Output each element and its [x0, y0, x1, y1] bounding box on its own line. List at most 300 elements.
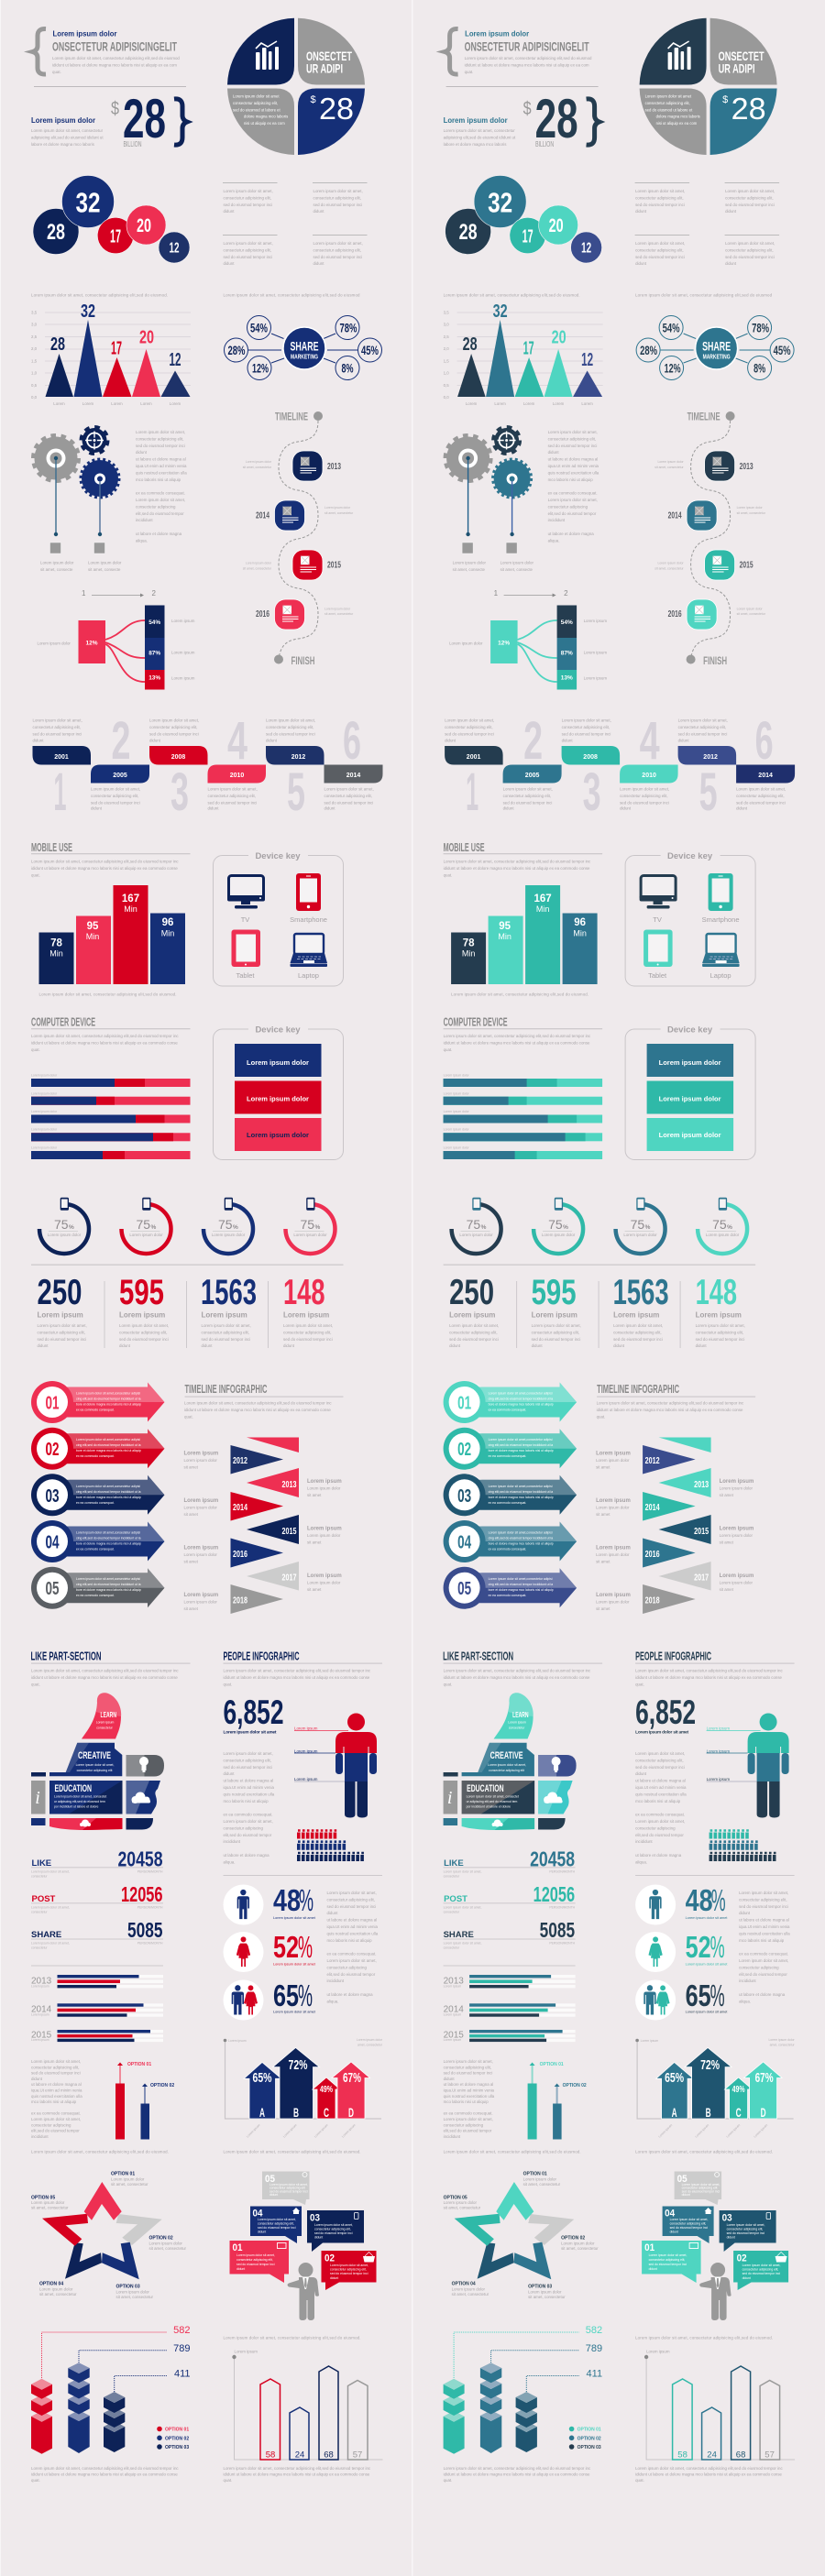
bubble 05: sed do eiusmod tempor inci — [270, 2189, 308, 2193]
timeline infographic flags: sit amet — [183, 1512, 199, 1517]
outlined bar chart: 68 — [736, 2450, 745, 2460]
key numbers: Lorem ipsum dolor sit amet, — [613, 1323, 663, 1328]
yearly bars: Lorem ipsum — [31, 2038, 50, 2042]
year steps timeline: didunt — [324, 806, 336, 810]
year steps timeline: consectetur adipisicing elit, — [91, 794, 138, 798]
percentage rows: mco laboris nisi ut aliquip — [326, 1938, 372, 1943]
sankey diagram: 54% — [148, 619, 160, 626]
year steps timeline: Lorem ipsum dolor sit amet, — [503, 786, 553, 792]
column two — [68, 2362, 90, 2453]
computer device stacked bars: Lorem ipsum dolor — [444, 1110, 470, 1113]
key numbers: Lorem ipsum — [613, 1310, 659, 1320]
key numbers: sed do eiusmod tempor inci — [283, 1337, 333, 1342]
year steps timeline: 2012 — [292, 754, 305, 761]
icon: light bulb — [552, 1757, 561, 1772]
ring gauges: Lorem ipsum dolor — [129, 1233, 163, 1237]
timeline infographic flags: sit amet — [183, 1560, 199, 1563]
percentage rows: % — [711, 1883, 726, 1917]
timeline infographic flags: 2013 — [282, 1480, 297, 1490]
people figure stat: aliqua. — [635, 1859, 647, 1864]
large person figure — [336, 1714, 377, 1818]
percentage rows: sed do eiusmod tempor inci — [326, 1904, 376, 1909]
computer device stacked bars: Lorem ipsum dolor — [31, 1110, 58, 1113]
key numbers: 250 — [37, 1273, 82, 1312]
bubble 03: consectetur adipiscing elit, — [727, 2227, 763, 2231]
triangle chart: 17 — [111, 339, 122, 359]
device key: colour legend — [213, 1025, 343, 1160]
timeline infographic flags: sit amet — [596, 1464, 610, 1470]
computer device stacked bars: COMPUTER DEVICE — [31, 1015, 95, 1028]
arrow column chart: 72% — [288, 2057, 308, 2073]
arrow 01: ex ea commodo consequat. — [489, 1408, 526, 1411]
bubble 04: didunt — [670, 2231, 678, 2234]
triangle chart: Lorem — [53, 401, 65, 406]
arrow 02: Lorem ipsum dolor sit amet,consectetur adipisi — [489, 1438, 553, 1441]
mobile use bar chart: 96 — [574, 917, 586, 928]
timeline path: 2016 — [256, 608, 270, 619]
isometric stacked columns: 582 — [586, 2325, 602, 2336]
mobile use bar chart: Lorem ipsum dolor sit amet, consectetur adipisicing elit,sed do eiusmod tempor inc — [444, 860, 591, 863]
text columns: Lorem ipsum dolor sit amet, — [725, 189, 775, 193]
presenter figure — [288, 2263, 319, 2320]
timeline infographic flags: Lorem ipsum — [183, 1593, 218, 1598]
people figure stat: didunt — [224, 1771, 235, 1776]
gears text block: Lorem ipsum dolor sit amet, — [136, 498, 185, 502]
triangle chart: 0,0 — [444, 395, 449, 400]
arrow column chart — [635, 2038, 795, 2154]
percentage rows: 65 — [686, 1979, 711, 2012]
triangle chart: Lorem — [82, 401, 94, 406]
gears text block: ex ea commodo consequat. — [136, 491, 185, 496]
triangle chart: 32 — [81, 301, 95, 322]
triangle chart: 28 — [50, 334, 65, 355]
share marketing diagram: Lorem ipsum dolor sit amet, consectetur adipisicing elit,sed do eiusmod — [224, 293, 360, 297]
key numbers: didunt — [613, 1343, 625, 1348]
triangle chart: Lorem — [494, 401, 506, 406]
stat: 28 billion: Lorem ipsum dolor sit amet, consectetur — [444, 128, 515, 133]
people figure stat: aliqua. — [224, 1859, 235, 1864]
timeline path: 2015 — [740, 559, 754, 570]
star diagram: sit amet, consectetur — [444, 2205, 481, 2209]
bubble 02: didunt — [330, 2276, 338, 2280]
triangle chart: Lorem ipsum dolor sit amet, consectetur adipisicing elit,sed do eiusmod. — [31, 293, 168, 297]
share marketing diagram: 28% — [227, 343, 246, 357]
icon: woman — [648, 1936, 663, 1967]
key numbers: consectetur adipisicing elit, — [37, 1330, 85, 1334]
key numbers: didunt — [37, 1343, 49, 1348]
bubble 05: 05 — [265, 2174, 275, 2185]
outlined bar chart: 58 — [677, 2450, 688, 2460]
social stats: 5085 — [127, 1918, 163, 1942]
bubble 01: consectetur adipiscing elit, — [236, 2258, 273, 2262]
timeline path: 2013 — [740, 461, 754, 472]
thumbs-up graphic: por incididunt ut labore et dolore — [54, 1805, 99, 1809]
timeline path: Lorem ipsum dolor — [737, 607, 764, 610]
mobile use bar chart: quat. — [444, 872, 452, 878]
percentage rows: 52 — [273, 1930, 299, 1964]
outlined bar chart: 24 — [295, 2450, 304, 2460]
bubble 02: Lorem ipsum dolor sit amet, — [330, 2264, 368, 2267]
year steps timeline: didunt — [678, 739, 689, 743]
triangle chart: Lorem — [523, 401, 535, 406]
isometric stacked columns: 582 — [173, 2325, 191, 2336]
triangle chart: 3,5 — [31, 310, 38, 315]
bubble 03: 03 — [722, 2212, 732, 2223]
people figure stat: Lorem ipsum dolor sit amet, — [635, 1819, 685, 1824]
text columns — [635, 182, 779, 266]
year steps timeline: 2010 — [230, 773, 244, 779]
computer device stacked bars: COMPUTER DEVICE — [444, 1015, 508, 1028]
pie chart: ONSECTET — [306, 49, 352, 63]
key numbers: Lorem ipsum dolor sit amet, — [119, 1323, 169, 1328]
arrow 01: ex ea commodo consequat. — [76, 1408, 115, 1411]
social stats: SHARE — [444, 1930, 474, 1940]
sankey diagram: 2 — [152, 589, 156, 597]
icon: speech blob — [80, 1820, 91, 1827]
computer device stacked bars: Lorem ipsum dolor — [444, 1145, 470, 1149]
triangle chart — [444, 293, 603, 406]
timeline infographic flags: sit amet — [596, 1560, 610, 1563]
icon: man — [237, 1890, 249, 1919]
text columns: consectetur adipisicing elit, — [314, 195, 361, 200]
mobile use bar chart: ididunt ut labore et dolore magna mco laboris nisi ut aliquip ex ea commodo conse — [31, 866, 178, 871]
arrow 05: Lorem ipsum dolor sit amet,consectetur adipisi — [489, 1577, 553, 1581]
legend: OPTION 03 — [578, 2445, 601, 2450]
mobile use bar chart: MOBILE USE — [31, 841, 72, 854]
percentage rows: quis nostrud exercitation ulla — [739, 1931, 790, 1935]
year steps timeline: Lorem ipsum dolor sit amet, — [266, 718, 315, 722]
mobile use bar chart: Min — [161, 929, 174, 938]
percentage rows: Lorem ipsum dolor sit amet — [273, 1916, 316, 1920]
timeline infographic flags: Lorem ipsum — [596, 1545, 631, 1551]
gears text block: ut labore et dolore magna — [136, 532, 182, 536]
mobile use bar chart: 95 — [87, 921, 99, 932]
legend: OPTION 01 — [165, 2427, 189, 2432]
social stats: PERSON/MONTH — [549, 1941, 576, 1945]
text columns: Lorem ipsum dolor sit amet, — [314, 189, 363, 193]
isometric stacked columns: Lorem ipsum dolor sit amet, consectetur adipisicing elit,sed do eiusmod tempor inc — [444, 2466, 591, 2471]
percentage rows: consectetur adipisicing elit, — [739, 1897, 787, 1902]
percentage rows: ex ea commodo consequat. — [739, 1952, 788, 1957]
timeline path: 2015 — [327, 559, 341, 570]
timeline path: 2016 — [668, 608, 682, 619]
outlined bar chart: 58 — [266, 2450, 275, 2460]
device key: icons: Smartphone — [702, 915, 740, 924]
bubble chart: 32 — [488, 187, 512, 218]
ring gauges: Lorem ipsum dolor — [212, 1233, 246, 1237]
text columns: consectetur adipisicing elit, — [635, 195, 684, 200]
gears text block: consectetur adipisicing elit, — [548, 436, 596, 441]
year steps timeline: didunt — [445, 739, 456, 743]
panel: teal colourway — [443, 18, 795, 2483]
text columns: Lorem ipsum dolor sit amet, — [224, 189, 273, 193]
arrow 04: cing elit,sed do eiusmod tempor incididunt ut la — [76, 1536, 141, 1540]
gears text block: elit,sed do eiusmod tempor — [548, 511, 597, 516]
speech bubbles with presenter — [229, 2172, 376, 2320]
text with option bars: iqua.Ut enim ad minim venia — [31, 2088, 82, 2093]
year steps timeline: 4 — [227, 711, 248, 771]
timeline infographic flags: 2018 — [645, 1596, 660, 1606]
heading: people infographic: Lorem ipsum dolor sit amet, consectetur adipisicing elit,sed do eiusmod tempor inc — [635, 1668, 783, 1673]
computer device stacked bars — [31, 1015, 191, 1159]
percentage rows: Lorem ipsum dolor sit amet, — [326, 1891, 377, 1895]
text with option bars: quis nostrud exercitation ulla — [444, 2094, 495, 2099]
text with option bars: OPTION 02 — [150, 2083, 174, 2088]
computer device stacked bars — [444, 1015, 602, 1159]
timeline infographic flags: sit amet — [307, 1540, 322, 1545]
legend — [569, 2427, 601, 2450]
people figure stat: Lorem ipsum dolor sit amet, — [224, 1819, 273, 1824]
sankey diagram: 12% — [85, 640, 98, 647]
bubble 02: didunt — [742, 2276, 751, 2280]
heading: like part-section: LIKE PART-SECTION — [31, 1650, 101, 1663]
timeline infographic flags: sit amet — [596, 1512, 610, 1517]
year steps timeline: consectetur adipisicing elit, — [266, 725, 314, 729]
bubble chart: 12 — [581, 240, 591, 257]
year steps timeline: 3 — [583, 762, 601, 822]
heading: people infographic — [224, 1650, 382, 1686]
social stats: consectetur — [444, 1946, 460, 1950]
people figure stat: Lorem ipsum dolor sit amet, — [224, 1751, 273, 1756]
share marketing diagram: 8% — [754, 361, 765, 376]
text with option bars: elit,sed do eiusmod tempor — [31, 2129, 80, 2133]
bubble 02 — [321, 2251, 376, 2290]
mobile use bar chart — [444, 841, 602, 997]
stat: 28 billion: labore et dolore magna mco laboris — [444, 142, 507, 147]
numbered arrow list — [444, 1381, 577, 1609]
key numbers: didunt — [283, 1343, 295, 1348]
header block: Lorem ipsum dolor sit amet, consectetur adipisicing elit,sed do eiusmod — [465, 56, 592, 60]
arrow 03: cing elit,sed do eiusmod tempor incididunt ut la — [76, 1490, 141, 1494]
year steps timeline: didunt — [91, 806, 103, 810]
text columns: consectetur adipisicing elit, — [725, 247, 774, 252]
text columns: consectetur adipisicing elit, — [725, 195, 774, 200]
social stats: consectetur — [444, 1910, 460, 1913]
yearly bars: Lorem ipsum — [444, 2012, 461, 2016]
yearly bars: 2015 — [31, 2031, 52, 2040]
timeline path: Lorem ipsum dolor — [658, 561, 684, 565]
year steps timeline: sed do eiusmod tempor inci — [620, 800, 669, 805]
panel: red and navy colourway — [31, 18, 383, 2483]
bubble 03: 03 — [310, 2212, 320, 2223]
isometric stacked columns: ididunt ut labore et dolore magna mco laboris nisi ut aliquip ex ea commodo conse — [444, 2472, 590, 2476]
star diagram: sit amet, consectetur — [523, 2182, 561, 2187]
text columns: consectetur adipisicing elit, — [314, 247, 361, 252]
mobile use bar chart: Min — [462, 949, 475, 959]
text with option bars: ex ea commodo consequat. — [444, 2111, 493, 2116]
percentage rows: ex ea commodo consequat. — [326, 1952, 376, 1957]
gears text block: mco laboris nisi ut aliquip — [136, 477, 182, 482]
bubble chart: 32 — [75, 187, 101, 218]
arrow column chart: Lorem ipsum dolor sit amet, consectetur adipisicing elit,sed do eiusmod. — [224, 2150, 361, 2154]
percentage rows: % — [298, 1930, 313, 1964]
timeline infographic flags: Lorem ipsum dolor — [720, 1580, 753, 1585]
percentage rows: iqua.Ut enim ad minim venia — [739, 1924, 790, 1929]
percentage rows: incididunt — [326, 1979, 345, 1983]
thumbs-up graphic: i — [447, 1788, 452, 1808]
heading: people infographic — [635, 1650, 795, 1686]
arrow column chart: C — [736, 2105, 742, 2120]
key numbers — [31, 1265, 343, 1348]
ring gauges: % — [69, 1224, 74, 1231]
computer device stacked bars: Lorem ipsum dolor — [444, 1074, 470, 1078]
triangle chart: 0,5 — [444, 383, 449, 388]
timeline path: TIMELINE — [275, 411, 308, 423]
timeline infographic flags: TIMELINE INFOGRAPHIC — [597, 1383, 679, 1396]
timeline infographic flags: Lorem ipsum dolor — [596, 1458, 630, 1463]
gears diagram — [33, 427, 122, 572]
device key: icons: Tablet — [648, 971, 667, 980]
key numbers: 595 — [532, 1273, 577, 1312]
bubble 04: 04 — [253, 2209, 263, 2220]
arrow column chart: Lorem ipsum dolor — [769, 2038, 795, 2042]
timeline path: 2014 — [256, 510, 270, 521]
icon: 2013 document — [705, 451, 735, 481]
percentage rows: % — [710, 1930, 725, 1964]
people figure stat: incididunt — [635, 1839, 653, 1844]
device key: colour legend — [625, 1025, 755, 1160]
ring gauges: Lorem ipsum dolor — [459, 1233, 493, 1237]
stat: 28 billion: BILLION — [123, 140, 142, 148]
arrow column chart: C — [324, 2105, 329, 2120]
timeline infographic flags: Lorem ipsum dolor — [720, 1533, 753, 1538]
year steps timeline: Lorem ipsum dolor sit amet, — [324, 786, 374, 792]
thumbs-up graphic: consectetur adipiscing elit — [489, 1769, 524, 1772]
text with option bars: Lorem ipsum dolor sit amet, — [31, 2059, 81, 2064]
column three — [104, 2392, 125, 2452]
triangle chart: Lorem — [581, 401, 593, 406]
column two — [480, 2362, 501, 2453]
timeline path: sit amet, consectetur — [654, 466, 684, 469]
text with option bars: OPTION 02 — [563, 2083, 587, 2088]
triangle chart: 12 — [169, 350, 182, 370]
timeline infographic flags: Lorem ipsum dolor sit amet, consectetur adipisicing elit,sed do eiusmod tempor inc — [597, 1400, 744, 1406]
social stats: Lorem ipsum dolor sit amet, — [444, 1941, 481, 1945]
presenter figure — [699, 2263, 732, 2320]
arrow 03: bore et dolore magna mco laboris nisi ut aliquip — [489, 1496, 554, 1499]
gears diagram: Lorem ipsum dolor — [453, 561, 486, 565]
text with option bars: consectetur adipiscing — [444, 2122, 484, 2127]
key numbers: consectetur adipisicing elit, — [613, 1330, 662, 1334]
arrow 04: cing elit,sed do eiusmod tempor incididunt ut la — [489, 1536, 553, 1540]
bubble 04 — [663, 2207, 714, 2243]
social stats: PERSON/MONTH — [549, 1906, 576, 1910]
pie chart: 28 — [319, 92, 354, 126]
percentage rows: iqua.Ut enim ad minim venia — [326, 1924, 378, 1929]
heading: like part-section — [31, 1650, 191, 1686]
yearly bars — [444, 1965, 576, 2042]
arrow 01: bore et dolore magna mco laboris nisi ut aliquip — [76, 1402, 141, 1406]
year steps timeline: Lorem ipsum dolor sit amet, — [445, 718, 494, 722]
sankey diagram: 2 — [564, 589, 568, 597]
arrow 02: Lorem ipsum dolor sit amet,consectetur adipisi — [76, 1438, 140, 1441]
pie chart: ONSECTET — [719, 49, 764, 63]
arrow column chart: B — [293, 2105, 299, 2120]
year steps timeline: sed do eiusmod tempor inci — [562, 731, 610, 736]
star diagram: Lorem ipsum dolor — [561, 2242, 595, 2245]
mobile use bar chart: MOBILE USE — [444, 841, 485, 854]
computer device stacked bars: Lorem ipsum dolor — [31, 1145, 58, 1149]
thumbs-up graphic: i — [35, 1788, 40, 1808]
social stats: PERSON/MONTH — [138, 1906, 163, 1910]
text columns: Lorem ipsum dolor sit amet, — [635, 189, 685, 193]
year steps timeline: Lorem ipsum dolor sit amet, — [562, 718, 611, 722]
gears diagram — [446, 427, 534, 572]
outlined bar chart: Lorem ipsum — [646, 2350, 670, 2353]
stat: 28 billion: $ — [523, 99, 532, 119]
year steps timeline: didunt — [503, 806, 514, 810]
key numbers: sed do eiusmod tempor inci — [532, 1337, 580, 1342]
text columns: sed do eiusmod tempor inci — [224, 203, 272, 207]
bubble 05: didunt — [270, 2193, 278, 2197]
outlined bar chart: Lorem ipsum dolor sit amet, consectetur adipisicing elit,sed do eiusmod tempor inc — [224, 2466, 371, 2471]
gears text block: didunt — [136, 450, 148, 455]
percentage rows: aliqua. — [326, 1999, 338, 2003]
bubble 03: Lorem ipsum dolor sit amet, — [727, 2223, 764, 2227]
device key: icons: TV — [653, 915, 662, 924]
people figure stat: Lorem ipsum dolor sit amet — [224, 1730, 277, 1736]
percentage rows — [224, 1883, 379, 2020]
pictogram rows — [297, 1831, 364, 1858]
people figure stat: 6,852 — [635, 1694, 696, 1731]
legend: OPTION 03 — [165, 2445, 189, 2450]
gears text block: sed do eiusmod tempor inci — [136, 444, 185, 448]
key numbers: didunt — [696, 1343, 707, 1348]
key numbers: sed do eiusmod tempor inci — [202, 1337, 250, 1342]
year steps timeline: 2005 — [113, 773, 127, 779]
timeline path: FINISH — [292, 654, 315, 667]
percentage rows: consectetur adipisicing elit, — [326, 1897, 375, 1902]
ring gauges: 75 — [136, 1217, 150, 1232]
yearly bars: Lorem ipsum — [444, 1985, 461, 1989]
year steps timeline: sed do eiusmod tempor inci — [266, 731, 315, 736]
percentage rows: quis nostrud exercitation ulla — [326, 1931, 379, 1935]
share marketing diagram: MARKETING — [291, 354, 318, 361]
key numbers: 1563 — [201, 1273, 257, 1312]
star diagram: OPTION 01 — [523, 2172, 547, 2177]
people figure stat: didunt — [635, 1771, 647, 1776]
isometric stacked columns: ididunt ut labore et dolore magna mco laboris nisi ut aliquip ex ea commodo conse — [31, 2472, 178, 2476]
year steps timeline: sed do eiusmod tempor inci — [736, 800, 786, 805]
social stats: Lorem ipsum dolor sit amet, — [31, 1941, 70, 1945]
text with option bars: OPTION 01 — [540, 2062, 564, 2067]
timeline infographic flags: 2014 — [645, 1503, 660, 1513]
year steps timeline: 6 — [755, 711, 774, 771]
text with option bars: sed do eiusmod tempor inci — [444, 2071, 492, 2076]
triangle chart: 3,0 — [31, 323, 38, 326]
year steps timeline: didunt — [33, 739, 44, 743]
triangle chart: Lorem — [466, 401, 478, 406]
timeline path: sit amet, consectetur — [324, 612, 354, 616]
computer device stacked bars: Lorem ipsum dolor sit amet, consectetur adipisicing elit,sed do eiusmod tempor inc — [444, 1034, 591, 1038]
key numbers: 148 — [696, 1273, 737, 1312]
arrow 05: 05 — [46, 1579, 59, 1599]
timeline infographic flags: Lorem ipsum — [720, 1573, 754, 1579]
people figure stat: quis nostrud exercitation ulla — [224, 1792, 275, 1796]
star diagram: Lorem ipsum dolor — [528, 2289, 562, 2295]
key numbers: Lorem ipsum dolor sit amet, — [37, 1323, 87, 1328]
header block: ididunt ut labore et dolore magna mco laboris nisi ut aliquip ex ea com — [52, 62, 177, 67]
percentage rows: % — [299, 1883, 314, 1917]
year steps timeline: Lorem ipsum dolor sit amet, — [736, 786, 786, 792]
mobile use bar chart: Min — [124, 904, 138, 914]
outlined bar chart — [224, 2335, 383, 2483]
gears text block: didunt — [548, 450, 559, 455]
bubble chart — [33, 176, 190, 263]
year steps timeline: consectetur adipisicing elit, — [736, 794, 785, 798]
social stats: Lorem ipsum dolor sit amet, — [31, 1906, 70, 1910]
triangle chart: 2,0 — [31, 346, 38, 351]
